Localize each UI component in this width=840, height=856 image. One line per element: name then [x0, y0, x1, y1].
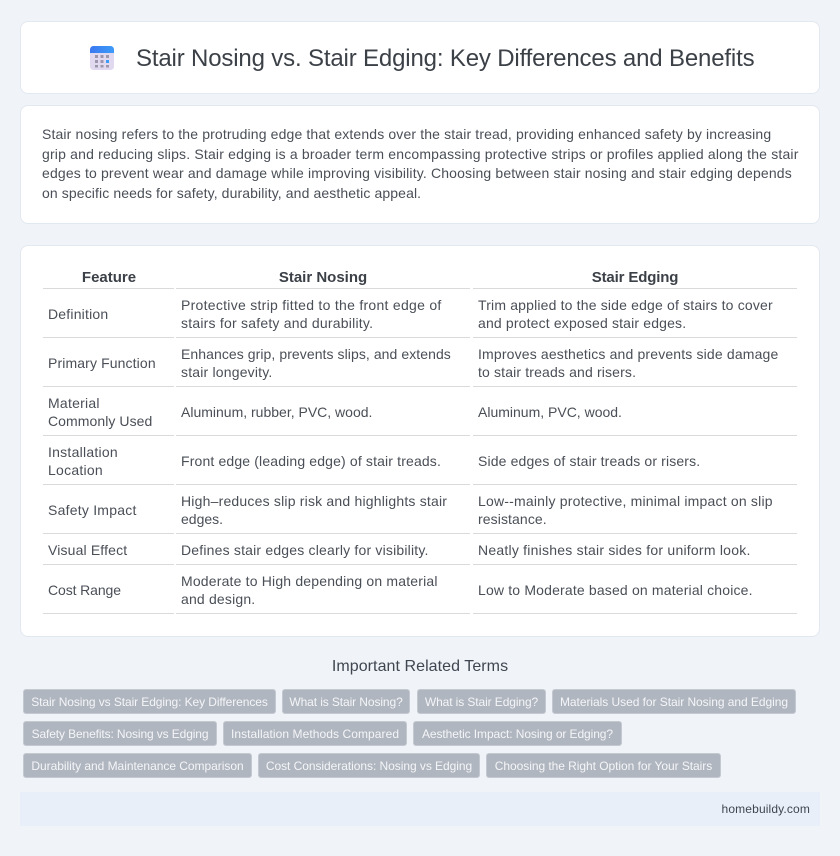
function: nosing: Enhances grip, prevents slips, and extends — [181, 346, 451, 362]
row: Installation: Installation — [48, 444, 118, 460]
table header: Stair Nosing: Stair Nosing — [279, 269, 367, 286]
table header: Stair Edging: Stair Edging — [592, 269, 678, 286]
intro paragraph — [42, 126, 799, 201]
tag — [486, 753, 721, 778]
row: Installation — [48, 444, 118, 478]
tag — [23, 689, 276, 714]
cost: nosing: Moderate to High depending on material — [181, 573, 438, 589]
intro paragraph: Stair nosing refers to the protruding edge that extends over the stair tread, providing enhanced safety by increasing — [42, 126, 771, 142]
intro paragraph: grip and reducing slips. Stair edging is a broader term encompassing protective strips or profiles applied along the stair — [42, 146, 799, 162]
tag — [223, 721, 407, 746]
definition: edging: Trim applied to the side edge of stairs to cover — [478, 297, 773, 313]
row: Material: Commonly Used — [48, 413, 152, 429]
related terms heading: Important Related Terms — [332, 658, 508, 675]
visual: nosing: Defines stair edges clearly for visibility. — [181, 542, 429, 558]
intro paragraph: edges to prevent wear and damage while improving visibility. Choosing between stair nosing and stair edging depends — [42, 165, 792, 181]
material: nosing: Aluminum, rubber, PVC, wood. — [181, 404, 372, 420]
icon: calendar — [90, 46, 114, 70]
function: nosing: stair longevity. — [181, 364, 272, 380]
footer bar — [20, 792, 820, 826]
tag: Safety Benefits: Nosing vs Edging — [32, 727, 208, 741]
tag: Aesthetic Impact: Nosing or Edging? — [422, 727, 613, 741]
cost: nosing: and design. — [181, 591, 255, 607]
tag — [413, 721, 622, 746]
definition: nosing: Protective strip fitted to the front edge of — [181, 297, 442, 313]
definition: edging: and protect exposed stair edges. — [478, 315, 686, 331]
tag: Stair Nosing vs Stair Edging: Key Differences — [31, 695, 268, 709]
tag — [258, 753, 480, 778]
tag: Cost Considerations: Nosing vs Edging — [266, 759, 472, 773]
tag: What is Stair Nosing? — [289, 695, 403, 709]
tag: What is Stair Edging? — [425, 695, 538, 709]
function: edging: Improves aesthetics and prevents side damage — [478, 346, 778, 362]
installation: edging: Side edges of stair treads or risers. — [478, 453, 700, 469]
safety: edging: resistance. — [478, 511, 547, 527]
tag — [282, 689, 410, 714]
row: Safety Impact: Safety Impact — [48, 502, 137, 518]
tag: Materials Used for Stair Nosing and Edging — [560, 695, 788, 709]
visual: edging: Neatly finishes stair sides for uniform look. — [478, 542, 751, 558]
safety: edging — [478, 493, 773, 527]
tag — [23, 753, 252, 778]
tag: Durability and Maintenance Comparison — [31, 759, 244, 773]
tag — [417, 689, 546, 714]
row: Material — [48, 395, 152, 429]
comparison table panel — [20, 245, 820, 637]
row: Installation: Location — [48, 462, 103, 478]
cost: edging: Low to Moderate based on material choice. — [478, 582, 753, 598]
footer source: homebuildy.com — [722, 802, 810, 816]
definition: nosing — [181, 297, 442, 331]
function: nosing — [181, 346, 451, 380]
related terms tags — [23, 689, 796, 778]
safety: nosing — [181, 493, 447, 527]
table header: Feature: Feature — [82, 269, 136, 286]
row: Primary Function: Primary Function — [48, 355, 156, 371]
header card — [20, 21, 820, 94]
definition: nosing: stairs for safety and durability. — [181, 315, 373, 331]
safety: edging: Low--mainly protective, minimal impact on slip — [478, 493, 773, 509]
tag: Installation Methods Compared — [231, 727, 399, 741]
cost: nosing — [181, 573, 438, 607]
tag — [552, 689, 796, 714]
tag — [23, 721, 217, 746]
material: edging: Aluminum, PVC, wood. — [478, 404, 622, 420]
row: Visual Effect: Visual Effect — [48, 542, 127, 558]
title: Stair Nosing vs. Stair Edging: Key Differences and Benefits — [136, 45, 754, 72]
function: edging — [478, 346, 778, 380]
function: edging: to stair treads and risers. — [478, 364, 636, 380]
tag: Choosing the Right Option for Your Stairs — [495, 759, 712, 773]
row: Material: Material — [48, 395, 100, 411]
intro text card — [20, 105, 820, 224]
row: Definition: Definition — [48, 306, 108, 322]
installation: nosing: Front edge (leading edge) of stair treads. — [181, 453, 441, 469]
intro paragraph: on specific needs for safety, durability, and aesthetic appeal. — [42, 184, 421, 200]
safety: nosing: edges. — [181, 511, 223, 527]
definition: edging — [478, 297, 773, 331]
row: Cost Range: Cost Range — [48, 582, 121, 598]
safety: nosing: High–reduces slip risk and highlights stair — [181, 493, 447, 509]
